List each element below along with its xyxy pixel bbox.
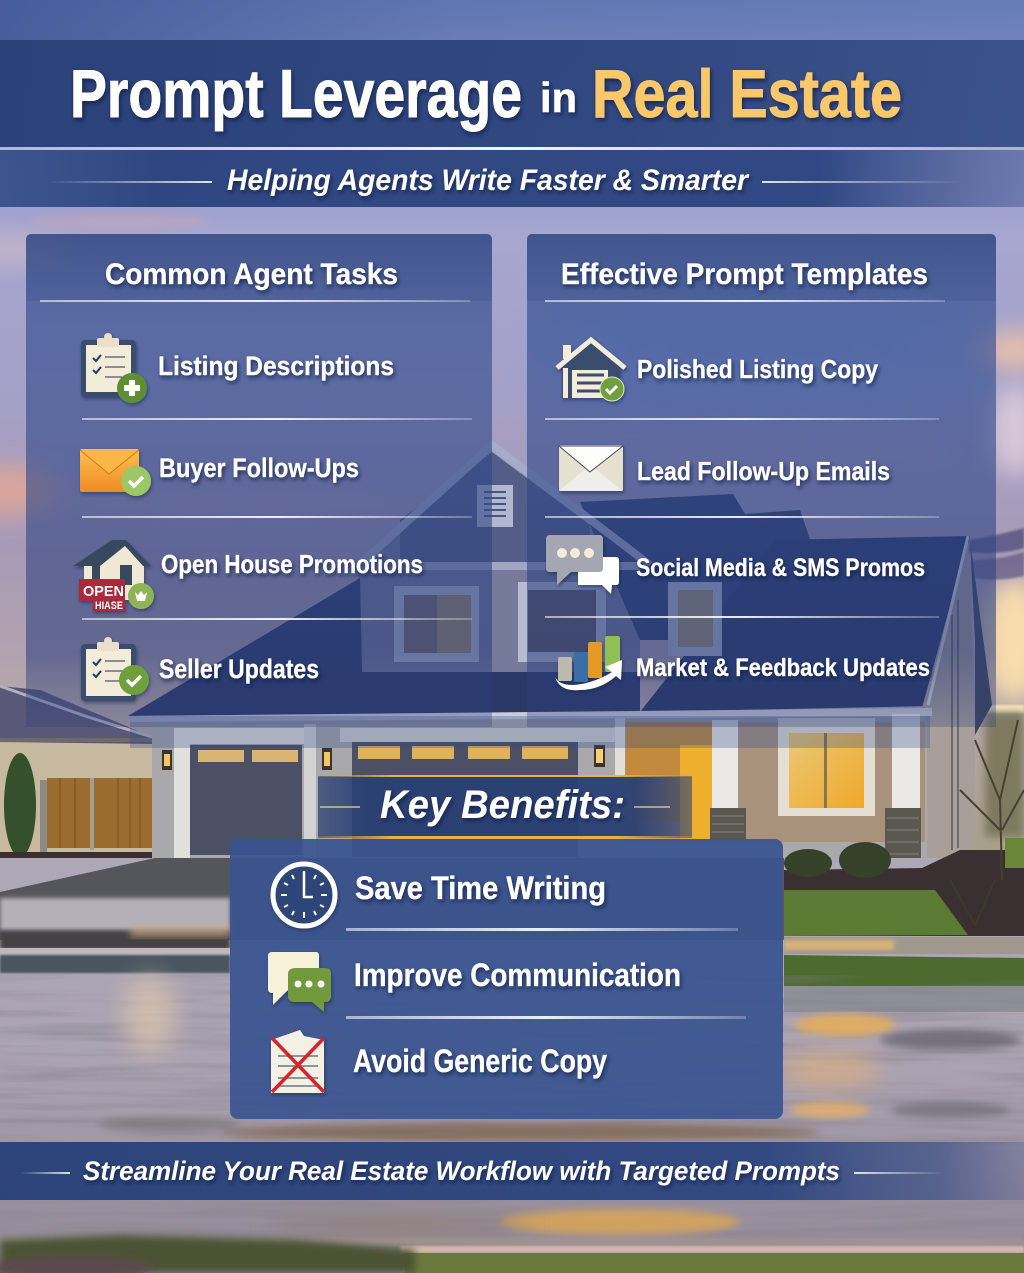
upper windows [394, 582, 722, 662]
right beds and lawns [784, 850, 1024, 936]
task label: Open House Promotions [161, 549, 423, 579]
subtitle banner [0, 147, 1024, 207]
benefit label: Avoid Generic Copy [353, 1043, 607, 1079]
heading: Effective Prompt Templates [561, 258, 928, 291]
upper gable wall [358, 452, 640, 690]
icon: clipboard with plus [81, 333, 147, 403]
template label: Lead Follow-Up Emails [637, 456, 890, 486]
icon: open house sign [73, 540, 154, 612]
panel: key benefits [230, 839, 783, 1119]
icon: clipboard with check [81, 637, 149, 701]
template label: Social Media & SMS Promos [636, 554, 925, 582]
title banner [0, 40, 1024, 147]
road texture [0, 975, 1024, 1145]
template label: Polished Listing Copy [637, 354, 878, 384]
gable trim [348, 445, 650, 575]
key benefits heading: Key Benefits: [380, 783, 625, 827]
bottom verge [500, 1209, 740, 1235]
ground floor wall [152, 716, 927, 858]
key benefits banner [318, 775, 692, 839]
icon: cream envelope [559, 445, 623, 491]
icon: crossed-out document [271, 1030, 324, 1093]
title banner: Real Estate [592, 56, 902, 132]
footer text: Streamline Your Real Estate Workflow with Targeted Prompts [83, 1156, 840, 1186]
heading: Common Agent Tasks [105, 258, 398, 291]
rear roofs [580, 494, 812, 640]
background: dusk sky [0, 0, 1024, 860]
task label: Seller Updates [159, 654, 319, 684]
blue tint band across the porch [130, 716, 930, 748]
icon: chat bubbles [546, 535, 619, 594]
driveway [0, 858, 784, 940]
main left roof [128, 578, 640, 716]
title text: Prompt Leverage [70, 56, 522, 132]
task label: Listing Descriptions [158, 351, 394, 381]
icon: clock [273, 864, 335, 926]
large window [778, 718, 875, 816]
background: shrubs [784, 842, 891, 878]
icon: growth bar chart with arrow [555, 636, 622, 690]
lamps [162, 750, 172, 770]
stone bases [710, 808, 746, 840]
panel: common agent tasks [26, 234, 492, 727]
icon: orange envelope with check [80, 449, 151, 496]
subtitle text: Helping Agents Write Faster & Smarter [227, 164, 750, 197]
background: wet street, lawn and reflections [0, 838, 1024, 1273]
porch and door [615, 718, 625, 778]
right gable end [922, 540, 975, 862]
benefit label: Improve Communication [354, 957, 681, 993]
icon: open house sign: HIASE [95, 600, 123, 612]
template label: Market & Feedback Updates [636, 654, 930, 682]
title banner: in [540, 74, 577, 121]
background: bare tree [950, 720, 1024, 925]
panel: effective prompt templates [527, 234, 996, 727]
icon: house with listing document [557, 340, 625, 401]
task label: Buyer Follow-Ups [159, 453, 359, 483]
benefit label: Save Time Writing [355, 870, 606, 906]
icon: communication bubbles [268, 952, 331, 1012]
background: neighbouring house and fence [0, 686, 155, 885]
main right roof [640, 536, 970, 712]
footer banner [0, 1142, 1024, 1200]
warm reflections [124, 975, 176, 1055]
icon: open house sign: OPEN [83, 583, 124, 600]
background: main house [128, 445, 992, 870]
